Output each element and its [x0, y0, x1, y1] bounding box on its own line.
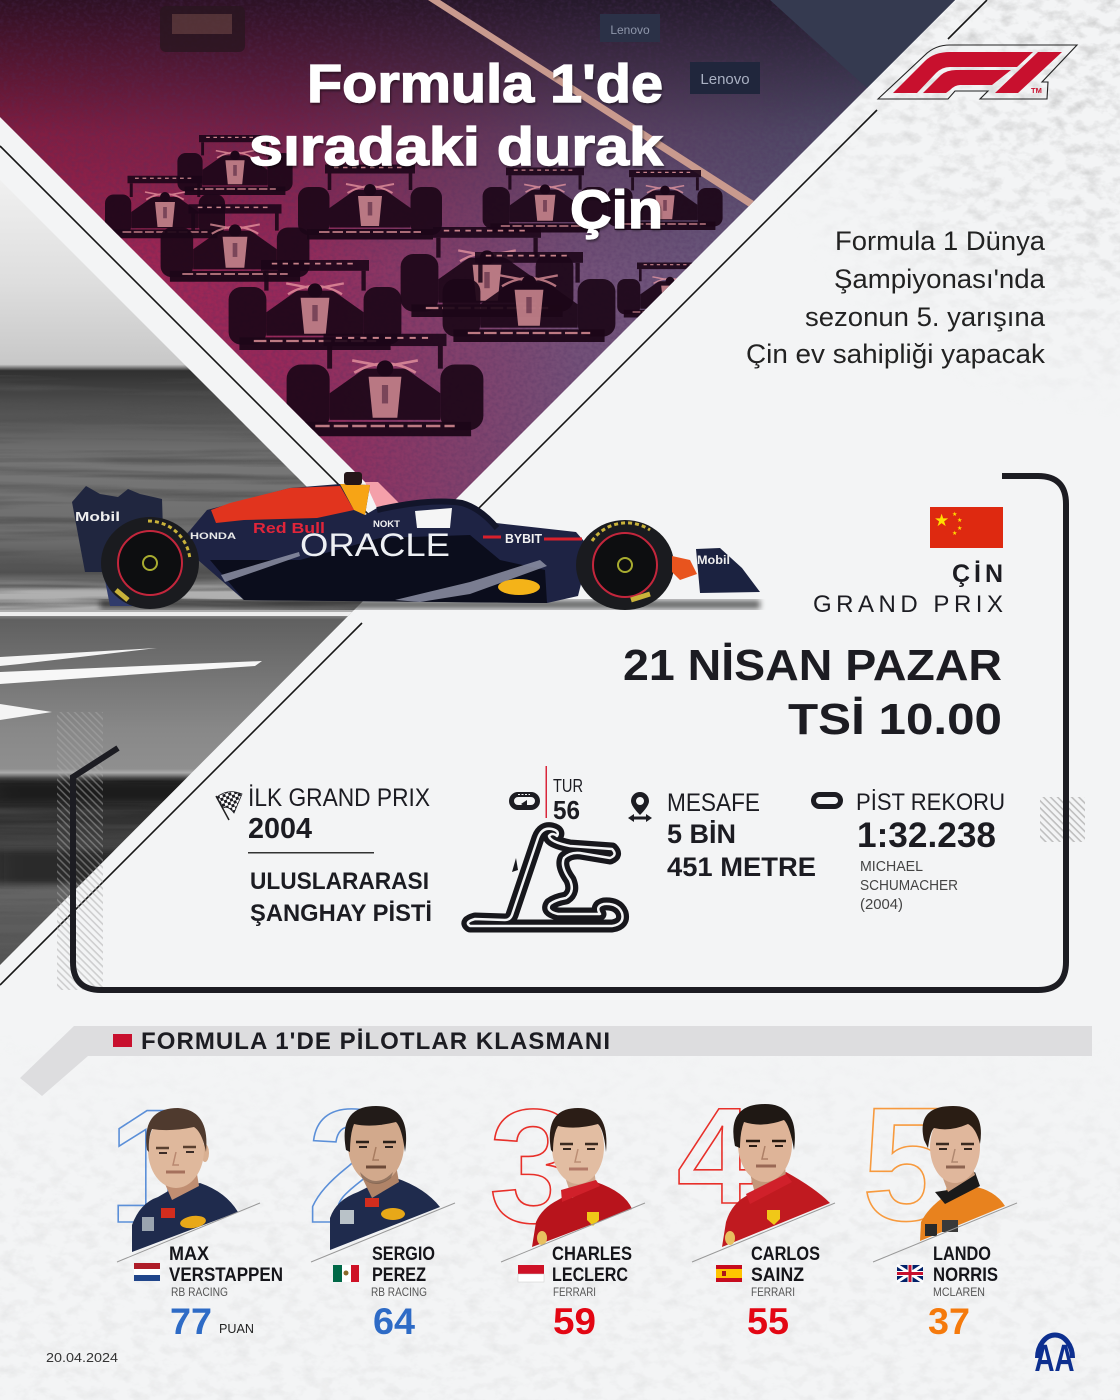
name: [552, 1244, 632, 1286]
logo: F1: [878, 45, 1077, 99]
hatch decoration right: [1040, 797, 1085, 842]
panel: grayscale motion blur track photo: [0, 197, 363, 965]
lap count: TUR: [553, 776, 583, 796]
distance: MESAFE: [667, 789, 760, 817]
driver 1: Max Verstappen: [108, 1076, 283, 1342]
floor silver details: [221, 552, 547, 602]
circuit map: Shanghai: [468, 829, 623, 926]
team: RB RACING: [171, 1285, 228, 1299]
name: VERSTAPPEN: [169, 1265, 283, 1286]
lap count: 56: [553, 795, 580, 825]
title: [249, 54, 664, 240]
dim car at the top of the photo: [160, 6, 245, 52]
sponsor texts: HONDA: [190, 531, 237, 541]
driver 3: Charles Leclerc: [489, 1076, 645, 1342]
rear wing: [72, 486, 163, 572]
car: Red Bull Formula 1 car: [72, 472, 760, 610]
subtitle text: sezonun 5. yarışına: [805, 302, 1046, 332]
heading: race name: [813, 560, 1003, 618]
name: SERGIO: [372, 1244, 435, 1265]
sponsor texts: BYBIT: [505, 531, 542, 546]
car shadow: [100, 600, 760, 609]
heading: race name: GRAND PRIX: [813, 591, 1003, 618]
portrait: [722, 1104, 830, 1247]
portrait: [532, 1108, 632, 1247]
divider: [873, 1203, 1017, 1262]
first grand prix: 2004: [248, 813, 312, 845]
divider: [311, 1203, 455, 1262]
flag: China: [930, 507, 1003, 548]
portrait: [330, 1106, 440, 1250]
race date and time: 21 NİSAN PAZAR: [623, 641, 1002, 690]
divider: [692, 1203, 835, 1262]
Lenovo board: [690, 62, 760, 94]
outline number 2: 2: [307, 1076, 397, 1257]
points: 77: [170, 1301, 212, 1342]
outline number 4: 4: [677, 1080, 753, 1233]
icon: lap loop: [512, 794, 538, 808]
driver 4: Carlos Sainz: [677, 1080, 835, 1342]
track record: PİST REKORU: [856, 789, 1005, 816]
engine cover yellow: [340, 484, 370, 515]
front wing: [696, 548, 760, 593]
name: CARLOS: [751, 1244, 820, 1265]
red stripes: [483, 537, 582, 539]
sponsor ellipse: [498, 579, 540, 595]
circuit name: ŞANGHAY PİSTİ: [250, 900, 432, 927]
points: 55: [747, 1301, 789, 1342]
flag: China: ★: [957, 525, 962, 532]
flag: Spain: [716, 1265, 742, 1282]
flag: United Kingdom: [897, 1265, 923, 1282]
team: FERRARI: [553, 1285, 596, 1299]
sponsor texts: ORACLE: [300, 527, 450, 563]
pink wedge behind cockpit: [365, 482, 402, 508]
name: CHARLES: [552, 1244, 632, 1265]
flag: Monaco: [518, 1265, 544, 1282]
lap count: [553, 776, 583, 825]
name: LANDO: [933, 1244, 991, 1265]
portrait: [920, 1106, 1005, 1241]
flag: Netherlands: [134, 1263, 160, 1281]
flag: China: ★: [952, 511, 957, 518]
subtitle text: Çin ev sahipliği yapacak: [746, 339, 1046, 369]
track record: [856, 789, 1005, 913]
distance: [667, 789, 816, 882]
race date and time: TSİ 10.00: [788, 695, 1002, 744]
hatch decoration left: [57, 712, 103, 990]
distance: 451 METRE: [667, 852, 816, 882]
flag: China: ★: [934, 511, 949, 530]
Lenovo board: Lenovo: [700, 71, 750, 88]
outline number 5: 5: [862, 1074, 952, 1255]
panel frame: race information: [73, 476, 1066, 990]
track record: MICHAEL: [860, 858, 923, 875]
thin diagonal lines framing the photos: [0, 0, 987, 985]
team: RB RACING: [371, 1285, 427, 1299]
first grand prix: İLK GRAND PRIX: [248, 783, 430, 812]
subtitle text: Formula 1 Dünya: [835, 226, 1046, 256]
title: sıradaki durak: [249, 117, 664, 177]
divider: [117, 1203, 260, 1262]
main body: [186, 484, 590, 603]
first grand prix: [248, 783, 430, 854]
rear floor: [103, 570, 160, 606]
driver 5: Lando Norris: [862, 1074, 1017, 1342]
name: MAX: [169, 1244, 209, 1265]
points: 64: [373, 1301, 415, 1342]
name: SAINZ: [751, 1265, 804, 1286]
heading: drivers standings: FORMULA 1'DE PİLOTLAR KLASMANI: [141, 1028, 610, 1055]
engine cover red livery: [211, 486, 354, 523]
sponsor texts: Mobil: [75, 509, 120, 524]
points: 37: [928, 1301, 970, 1342]
cockpit window: [415, 508, 452, 528]
icon: track record: [814, 794, 840, 806]
airbox: [344, 472, 362, 485]
portrait: [132, 1108, 238, 1252]
panel: starting grid race photo: [0, 0, 960, 540]
sponsor texts: Mobil: [697, 553, 730, 567]
logo: Anadolu Agency: [1034, 1335, 1074, 1380]
sponsor texts: Red Bull: [253, 520, 325, 537]
outline number 3: 3: [489, 1076, 579, 1257]
circuit name: ULUSLARARASI: [250, 868, 429, 895]
sponsor texts: NOKT: [373, 519, 401, 529]
driver 2: Sergio Perez: [307, 1076, 455, 1342]
title: Formula 1'de: [307, 54, 663, 114]
flag: China: ★: [957, 517, 962, 524]
title: Çin: [570, 180, 663, 240]
team: MCLAREN: [933, 1285, 985, 1299]
track record: 1:32.238: [857, 816, 996, 855]
icon: distance pin: [628, 792, 652, 822]
name: LECLERC: [552, 1265, 628, 1286]
team: FERRARI: [751, 1285, 795, 1299]
section marker: [113, 1034, 132, 1047]
red divider: [546, 766, 547, 818]
points: 59: [553, 1301, 596, 1342]
name: [372, 1244, 435, 1286]
sponsor texts: [75, 509, 730, 567]
track record: (2004): [860, 896, 903, 913]
outline number 1: 1: [108, 1076, 198, 1257]
name: PEREZ: [372, 1265, 426, 1286]
track record: SCHUMACHER: [860, 877, 958, 894]
date: 20.04.2024: [46, 1350, 118, 1365]
points label: PUAN: [219, 1321, 254, 1336]
Lenovo board top: Lenovo: [610, 23, 650, 37]
name: [751, 1244, 820, 1286]
nose red detail: [672, 556, 697, 580]
logo: Anadolu Agency: AA: [1034, 1338, 1074, 1380]
name: [933, 1244, 998, 1286]
circuit name: [250, 868, 432, 927]
name: [169, 1244, 283, 1286]
distance: 5 BİN: [667, 819, 736, 849]
section band: [20, 1026, 1092, 1096]
heading: race name: ÇİN: [952, 560, 1003, 588]
dark lower body: [210, 535, 547, 603]
wheels: [101, 517, 674, 610]
name: NORRIS: [933, 1265, 998, 1286]
halo: [377, 502, 497, 528]
race cars on the grid: [105, 135, 723, 436]
logo: F1: TM: [1031, 86, 1042, 95]
race date and time: [623, 641, 1002, 744]
flag: Mexico: [333, 1265, 359, 1282]
flag: China: ★: [952, 530, 957, 537]
subtitle text: Şampiyonası'nda: [834, 264, 1046, 294]
divider: [501, 1203, 645, 1262]
Lenovo board top: [600, 14, 660, 42]
subtitle text: [746, 226, 1046, 369]
icon: checkered flag: [216, 792, 242, 820]
